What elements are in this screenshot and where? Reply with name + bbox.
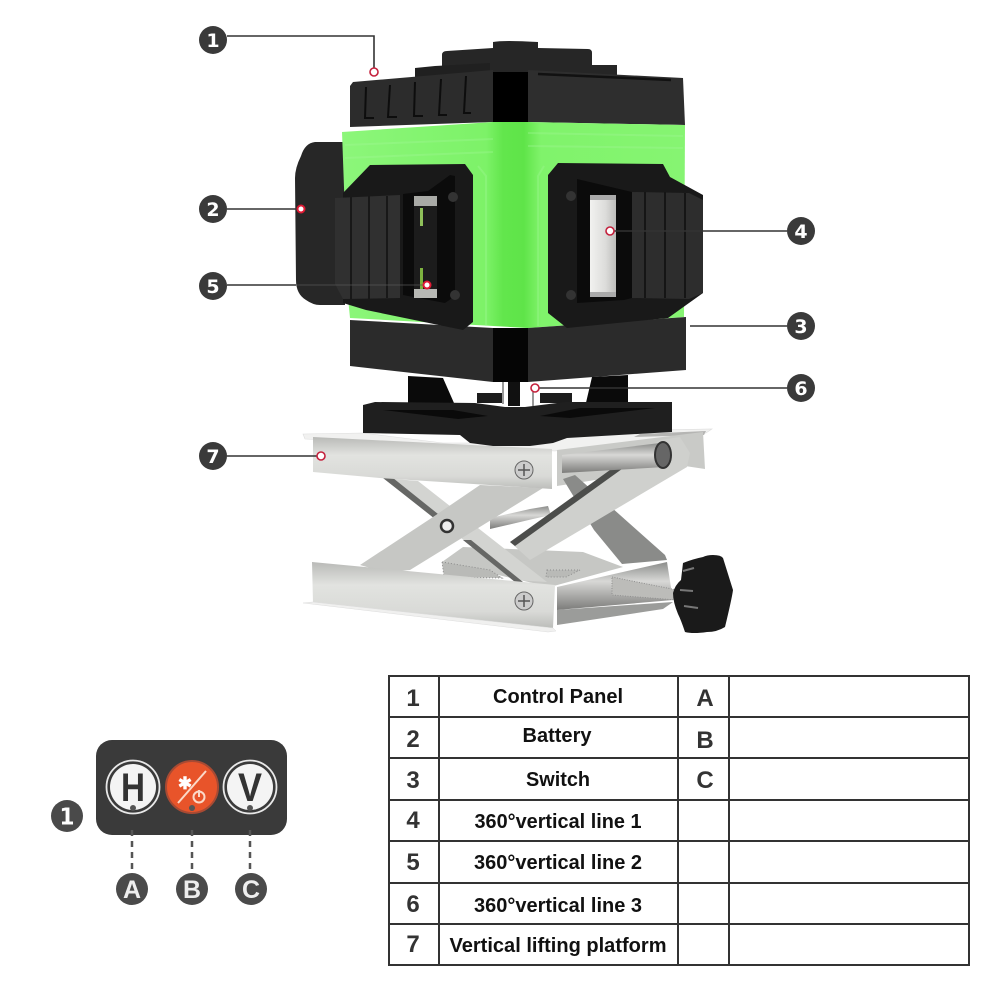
knob <box>673 555 733 633</box>
pivot <box>441 520 453 532</box>
button power/brightness: ✱ <box>178 774 192 793</box>
badge panel 1: 1 <box>60 804 74 830</box>
callout 2 <box>199 195 304 223</box>
top front face <box>313 437 552 489</box>
laser level <box>295 41 703 382</box>
top screw <box>515 461 533 479</box>
callout 4 <box>606 217 815 245</box>
button V <box>224 760 276 814</box>
callout 5: 5 <box>206 276 220 298</box>
button H: H <box>121 766 145 810</box>
center post <box>477 382 572 406</box>
stand base <box>363 402 672 446</box>
base rear <box>442 547 623 587</box>
badge C: C <box>242 876 260 904</box>
lower rod <box>557 562 673 610</box>
panel background <box>96 740 287 835</box>
letters <box>696 685 714 794</box>
badge panel 1 <box>51 800 83 832</box>
part names: Switch <box>526 769 590 791</box>
stand <box>363 375 672 446</box>
right spring <box>546 570 580 577</box>
row numbers: 4 <box>406 807 420 834</box>
green body <box>342 122 685 328</box>
button H <box>106 760 160 814</box>
lower housing <box>350 317 686 382</box>
dashed connectors <box>132 830 250 873</box>
right arm <box>510 437 690 560</box>
parts table <box>389 676 969 965</box>
base recesses <box>383 408 655 419</box>
callout 6: 6 <box>794 378 808 400</box>
callout 1: 1 <box>206 30 220 52</box>
top plate <box>303 429 712 451</box>
lifting platform <box>303 429 733 633</box>
callout 6 <box>531 374 815 402</box>
row numbers: 3 <box>406 767 420 794</box>
letters: A <box>696 685 714 712</box>
callout 7: 7 <box>206 446 220 468</box>
badge C <box>235 873 267 905</box>
green highlights <box>345 133 683 326</box>
row numbers: 7 <box>406 931 420 958</box>
base front face <box>312 562 555 628</box>
center rod <box>490 506 551 529</box>
callout 7 <box>199 442 325 470</box>
badge B: B <box>183 876 201 904</box>
scissor arm B <box>360 485 543 572</box>
rod end <box>655 442 671 468</box>
stand legs <box>408 375 628 407</box>
left window <box>414 196 437 298</box>
callout 3: 3 <box>794 316 808 338</box>
part names: 360°vertical line 1 <box>474 811 642 833</box>
row numbers: 2 <box>406 726 420 753</box>
left grip <box>335 195 400 299</box>
right window <box>590 195 616 297</box>
callout 3 <box>690 312 815 340</box>
button power/brightness <box>166 761 218 813</box>
badge B <box>176 873 208 905</box>
right arm strip <box>510 452 640 546</box>
bottom screw <box>515 592 533 610</box>
lower plate <box>557 602 673 625</box>
threaded screw <box>612 577 677 600</box>
part names: 360°vertical line 2 <box>474 852 642 874</box>
row numbers: 5 <box>406 849 420 876</box>
row numbers <box>406 685 420 958</box>
left lens housing <box>335 164 473 330</box>
rear bracket <box>557 432 705 486</box>
top housing <box>350 41 685 127</box>
bottom flange <box>303 602 556 632</box>
table grid <box>389 676 969 965</box>
left spring <box>442 562 502 578</box>
badge A <box>116 873 148 905</box>
serrated plate edge <box>634 431 706 437</box>
control panel diagram <box>51 740 287 905</box>
letters: B <box>696 727 714 754</box>
callout 2: 2 <box>206 199 220 221</box>
part names: Battery <box>522 725 592 747</box>
part names: Vertical lifting platform <box>450 935 666 957</box>
part names: 360°vertical line 3 <box>474 895 642 917</box>
callout 1 <box>199 26 378 76</box>
part names: Control Panel <box>493 686 623 708</box>
battery <box>295 142 345 305</box>
row numbers: 1 <box>406 685 420 712</box>
badge A: A <box>123 876 141 904</box>
right lens housing <box>548 163 703 328</box>
letters: C <box>696 767 714 794</box>
top rod <box>562 443 665 473</box>
right grip <box>632 192 703 299</box>
row numbers: 6 <box>406 891 420 918</box>
callout 5 <box>199 272 430 300</box>
part names <box>450 686 666 957</box>
knob highlights <box>680 568 698 608</box>
scissor arm A <box>383 478 547 582</box>
rear right arm <box>563 475 667 564</box>
callout 4: 4 <box>794 221 808 243</box>
button V: V <box>238 766 262 810</box>
